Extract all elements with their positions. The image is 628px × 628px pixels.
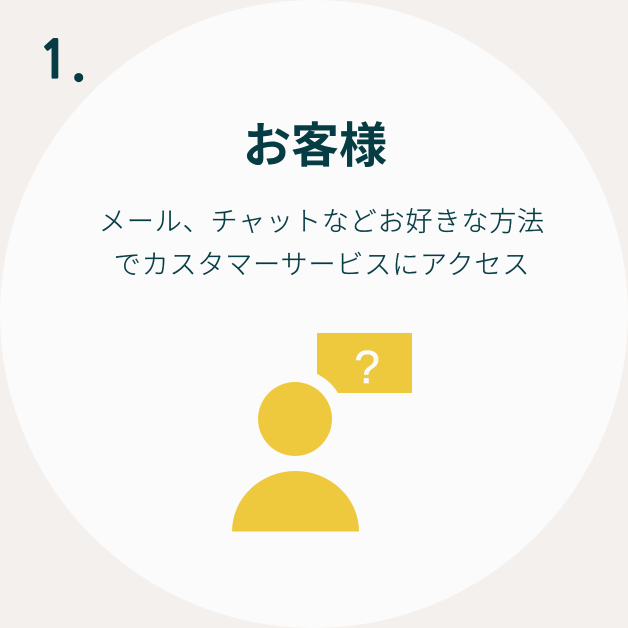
icon: person body bbox=[232, 471, 359, 532]
icon: person head bbox=[258, 382, 332, 456]
step number: 1. bbox=[38, 34, 87, 86]
heading: お客様 bbox=[243, 106, 387, 176]
icon: speech bubble bbox=[317, 333, 412, 393]
text block: description: でカスタマーサービスにアクセス bbox=[114, 243, 530, 282]
text block: description bbox=[99, 200, 545, 282]
text block: description: メール、チャットなどお好きな方法 bbox=[99, 200, 545, 239]
icon: question mark: ? bbox=[354, 341, 380, 393]
